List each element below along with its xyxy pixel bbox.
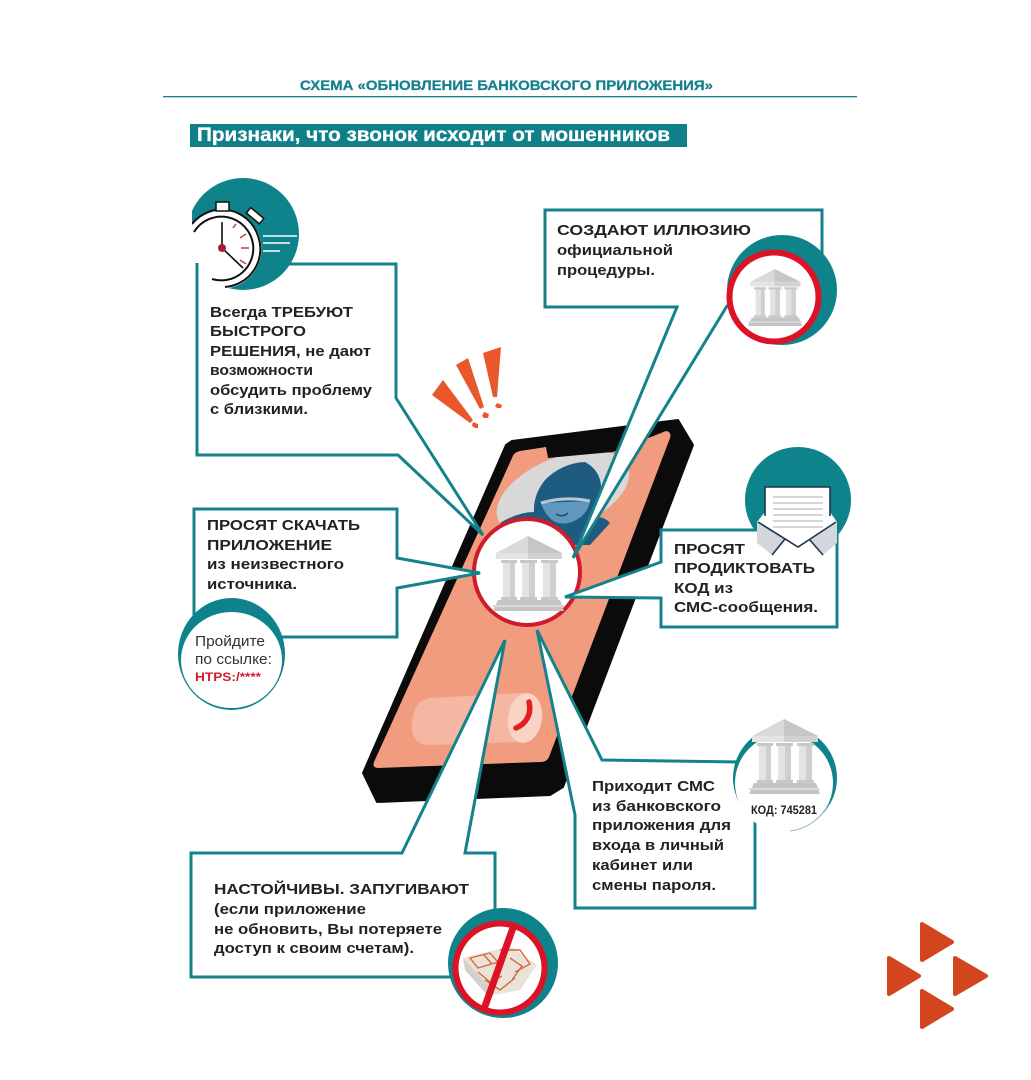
callout text: ПРОДИКТОВАТЬ	[674, 560, 815, 577]
callout text: СОЗДАЮТ ИЛЛЮЗИЮ	[557, 222, 751, 239]
callout text: из банковского	[592, 798, 721, 815]
callout text: обсудить проблему	[210, 382, 373, 399]
callout text: доступ к своим счетам).	[214, 940, 414, 957]
callout text: ПРОСЯТ СКАЧАТЬ	[207, 517, 360, 534]
callout text: ПРИЛОЖЕНИЕ	[207, 537, 332, 554]
icon: link bubble: HTPS:/****	[195, 672, 262, 684]
callout text: источника.	[207, 576, 297, 593]
callout text: смены пароля.	[592, 877, 716, 894]
callout text: РЕШЕНИЯ, не дают	[210, 343, 371, 360]
icon: bank code message: КОД: 745281	[751, 805, 818, 817]
callout: dictate code	[565, 530, 837, 627]
callout text	[207, 517, 360, 593]
callout text: из неизвестного	[207, 556, 344, 573]
phone body	[363, 420, 693, 802]
callout text: официальной	[557, 242, 673, 259]
callout: official procedure	[545, 210, 822, 558]
icon: stopwatch	[192, 178, 299, 290]
callout text: КОД из	[674, 580, 733, 597]
callout text: СМС-сообщения.	[674, 599, 818, 616]
central bank badge	[474, 519, 580, 625]
callout text: НАСТОЙЧИВЫ. ЗАПУГИВАЮТ	[214, 880, 469, 898]
callout text	[214, 880, 469, 957]
callout: download app	[194, 509, 480, 637]
callout text: возможности	[210, 362, 313, 379]
icon: crossed-out money	[448, 908, 558, 1018]
header title: СХЕМА «ОБНОВЛЕНИЕ БАНКОВСКОГО ПРИЛОЖЕНИЯ»	[300, 78, 713, 93]
callout: pressure and threats	[191, 640, 505, 977]
icon: link bubble	[178, 598, 285, 710]
callout text: процедуры.	[557, 262, 655, 279]
callout text: не обновить, Вы потеряете	[214, 921, 442, 938]
banner heading: Признаки, что звонок исходит от мошенников	[197, 125, 670, 146]
callout text: Приходит СМС	[592, 778, 715, 795]
callout text	[557, 222, 751, 279]
callout text: (если приложение	[214, 901, 366, 918]
icon: bank in red ring	[727, 235, 837, 345]
icon: link bubble: по ссылке:	[195, 652, 272, 668]
callout text: кабинет или	[592, 857, 693, 874]
icon: link bubble: Пройдите	[195, 634, 265, 650]
callout text: ПРОСЯТ	[674, 541, 745, 558]
callout text: Всегда ТРЕБУЮТ	[210, 304, 353, 321]
icon: phone handset	[516, 702, 530, 728]
header rule	[163, 96, 857, 97]
callout text: приложения для	[592, 817, 731, 834]
hacker portrait	[496, 452, 630, 545]
callout text	[210, 304, 373, 418]
icon: bank code message	[733, 719, 837, 832]
logo	[889, 924, 986, 1027]
callout text	[592, 778, 731, 894]
callout text: БЫСТРОГО	[210, 323, 306, 340]
phone screen	[374, 431, 670, 768]
phone illustration	[363, 420, 693, 802]
callout text	[674, 541, 818, 616]
callout: quick decision	[197, 264, 483, 535]
callout: SMS from bank app	[537, 630, 755, 908]
callout text: с близкими.	[210, 401, 308, 418]
callout text: входа в личный	[592, 837, 724, 854]
incoming call slider	[412, 691, 545, 745]
icon: envelope	[757, 487, 837, 555]
icon: exclamation marks	[432, 347, 502, 428]
envelope backdrop circle	[745, 447, 851, 553]
